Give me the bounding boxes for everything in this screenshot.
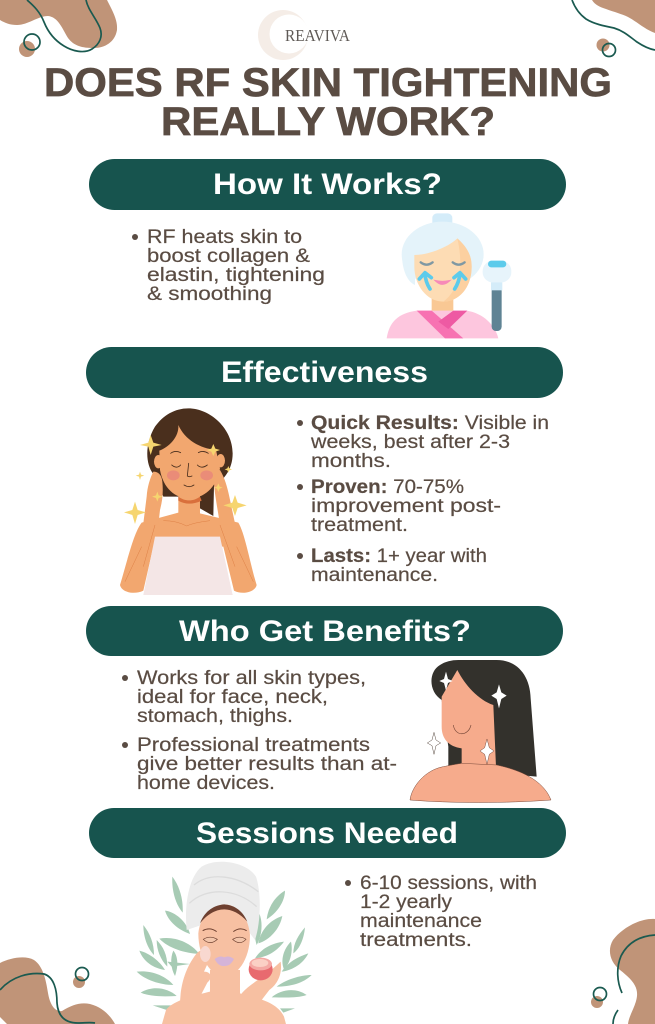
text: how it works <box>132 227 325 305</box>
text: who gets benefits: Works for all skin types, <box>137 668 366 689</box>
title: DOES RF SKIN TIGHTENING <box>44 61 612 105</box>
heading: how it works: How It Works? <box>213 168 442 201</box>
heading: how it works <box>89 159 566 210</box>
text: who gets benefits: home devices. <box>137 773 275 794</box>
text: effectiveness: Proven: 70-75% <box>311 477 464 498</box>
heading: sessions needed: Sessions Needed <box>196 817 458 850</box>
logo: Reaviva: REAVIVA <box>285 26 350 45</box>
heading: effectiveness: Effectiveness <box>221 356 428 389</box>
panel: effectiveness <box>86 347 563 595</box>
text: sessions needed: treatments. <box>360 930 472 951</box>
icon: woman touching face <box>120 408 257 595</box>
text: sessions needed: 1-2 yearly <box>360 892 453 913</box>
heading: who get benefits <box>86 606 563 656</box>
panel: who gets benefits <box>86 606 563 802</box>
heading: sessions needed <box>89 808 566 858</box>
icon: woman with towel and cream <box>137 862 312 1024</box>
text: who gets benefits: Professional treatments <box>137 735 370 756</box>
panel: sessions needed <box>89 808 566 1024</box>
icon: woman with facial roller <box>387 213 511 338</box>
text: effectiveness: weeks, best after 2-3 <box>310 432 510 453</box>
heading: who get benefits: Who Get Benefits? <box>179 615 471 648</box>
title <box>44 61 612 144</box>
text: who gets benefits <box>122 668 397 794</box>
text: sessions needed <box>345 873 537 951</box>
decoration: bottom right blob <box>591 919 655 1024</box>
text: sessions needed: maintenance <box>360 911 482 932</box>
decoration: top left blob <box>0 0 117 57</box>
decoration: bottom left blob <box>0 957 115 1024</box>
text: effectiveness: maintenance. <box>311 565 438 586</box>
text: how it works: elastin, tightening <box>147 265 325 286</box>
text: effectiveness: Lasts: 1+ year with <box>311 546 487 567</box>
heading: effectiveness <box>86 347 563 398</box>
text: effectiveness: Quick Results: Visible in <box>311 413 549 434</box>
text: who gets benefits: ideal for face, neck, <box>137 687 328 708</box>
icon: woman with long dark hair <box>410 660 551 802</box>
text: who gets benefits: stomach, thighs. <box>137 706 293 727</box>
text: effectiveness: treatment. <box>311 515 408 536</box>
title: REALLY WORK? <box>161 100 495 144</box>
text: effectiveness <box>297 413 549 586</box>
logo: Reaviva <box>258 10 350 60</box>
text: how it works: RF heats skin to <box>147 227 302 248</box>
decoration: top right blob <box>572 0 655 56</box>
text: effectiveness: months. <box>311 451 391 472</box>
text: how it works: & smoothing <box>147 284 272 305</box>
text: effectiveness: improvement post- <box>311 496 501 517</box>
text: how it works: boost collagen & <box>147 246 310 267</box>
text: sessions needed: 6-10 sessions, with <box>360 873 537 894</box>
text: who gets benefits: give better results than at- <box>137 754 397 775</box>
panel: how it works <box>89 159 566 338</box>
